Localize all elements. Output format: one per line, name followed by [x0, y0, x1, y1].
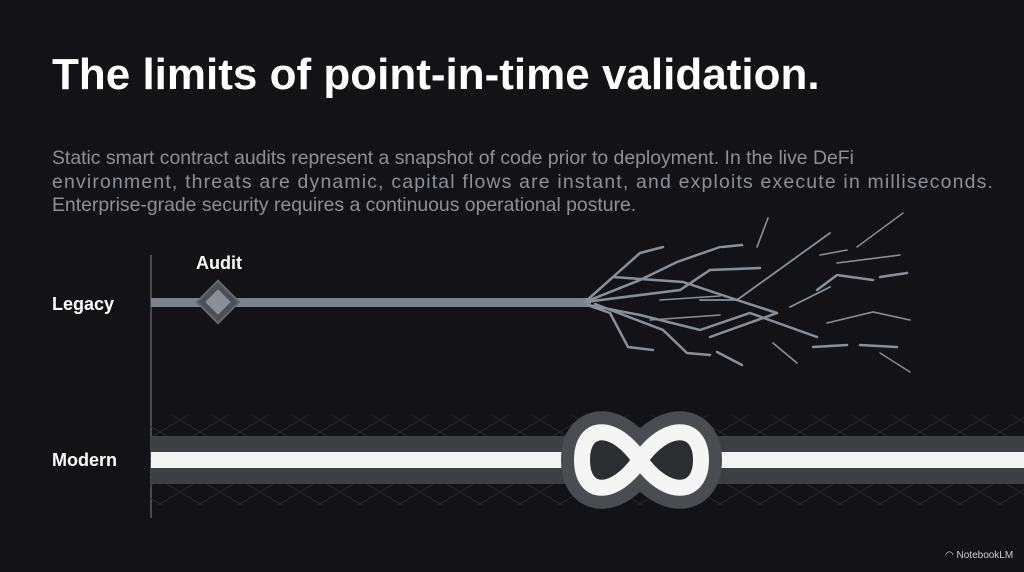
- description paragraph: [52, 147, 994, 216]
- footer logo: ◠ NotebookLM: [945, 550, 1013, 561]
- icon: infinity: [582, 432, 701, 488]
- label: Legacy: Legacy: [52, 294, 114, 314]
- icon: audit diamond: [197, 281, 239, 323]
- title: The limits of point-in-time validation.: [52, 50, 820, 99]
- description paragraph: Static smart contract audits represent a snapshot of code prior to deployment. In the live DeFi: [52, 147, 854, 169]
- description paragraph: Enterprise-grade security requires a continuous operational posture.: [52, 194, 636, 216]
- label: Audit: Audit: [196, 253, 242, 273]
- description paragraph: environment, threats are dynamic, capital flows are instant, and exploits execute in milliseconds.: [52, 170, 994, 192]
- label: Modern: Modern: [52, 450, 117, 470]
- axis line: [150, 255, 152, 518]
- modern timeline: [150, 414, 1024, 506]
- legacy timeline: [151, 213, 910, 372]
- fracture lines: [585, 213, 910, 372]
